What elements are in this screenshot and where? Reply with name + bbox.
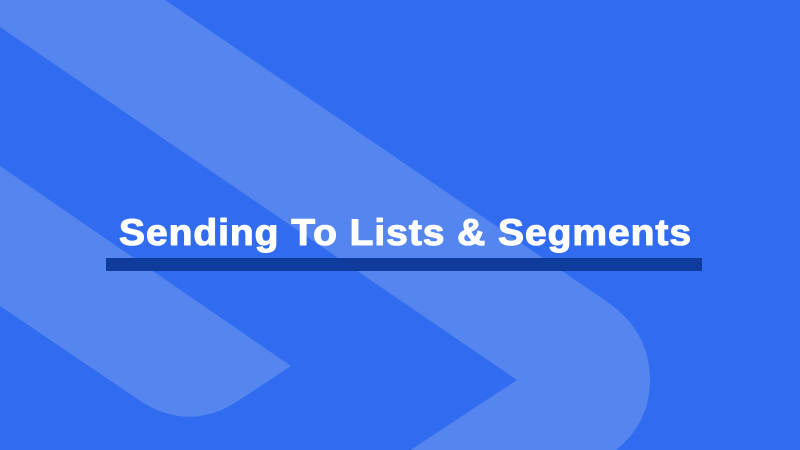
small chevron shape — [0, 166, 291, 417]
underline bar — [106, 258, 702, 271]
title: Sending To Lists & Segments — [119, 212, 692, 253]
